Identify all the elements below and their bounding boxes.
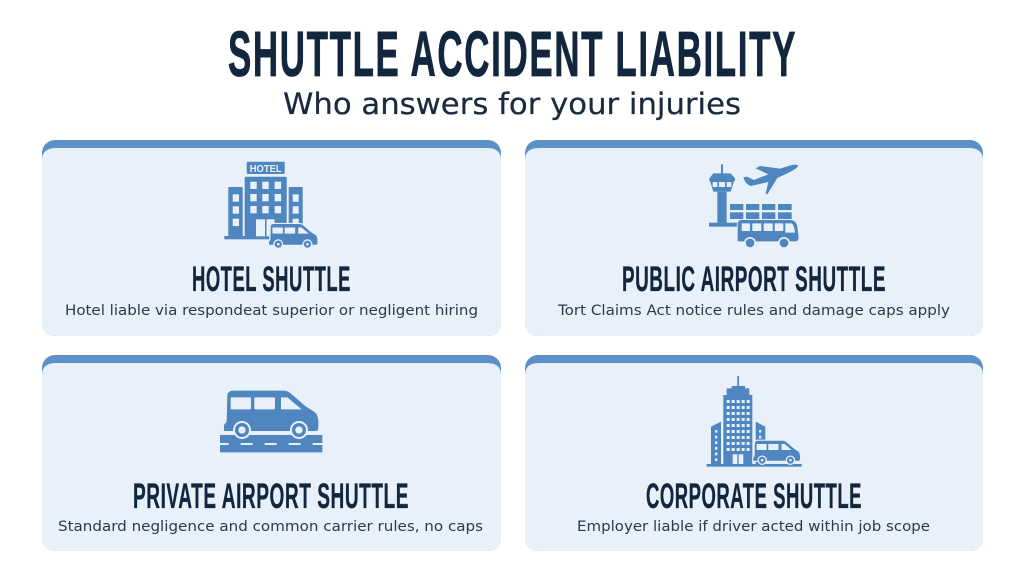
description: Employer liable if driver acted within job scope [577,519,930,535]
card background [525,355,983,551]
panel: private airport shuttle [42,355,501,551]
panel: hotel shuttle [42,140,501,336]
description: Hotel liable via respondeat superior or negligent hiring [65,303,478,319]
heading: HOTEL SHUTTLE [192,260,351,299]
description: Tort Claims Act notice rules and damage caps apply [557,303,950,319]
description: Standard negligence and common carrier rules, no caps [58,519,483,535]
heading: PRIVATE AIRPORT SHUTTLE [133,477,409,516]
icon: hotel with van: HOTEL [250,164,282,175]
card background [525,140,983,336]
panel: corporate shuttle [525,355,983,551]
icon: van on road [220,391,322,452]
icon: tower, plane and bus [709,164,799,249]
card background [42,355,501,551]
panel: public airport shuttle [525,140,983,336]
subtitle: Who answers for your injuries [283,87,741,121]
icon: hotel with van [224,162,317,249]
icon: office tower with van [707,376,802,467]
card background [42,140,501,336]
